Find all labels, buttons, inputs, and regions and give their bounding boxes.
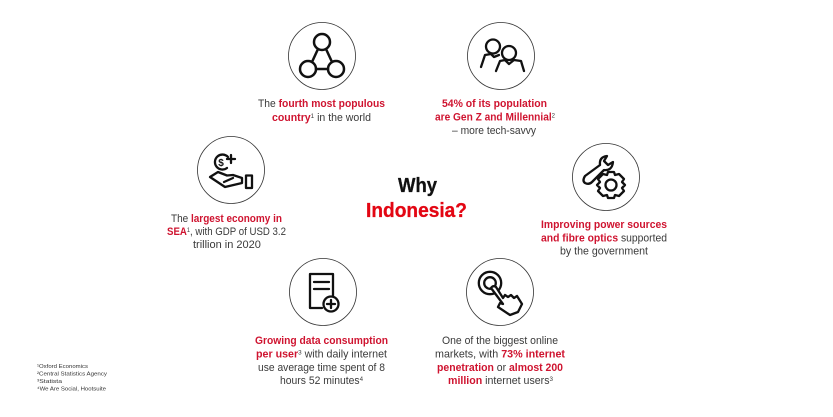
heading: Why Indonesia? <box>366 175 467 222</box>
text: largest economy: SEA <box>167 226 187 238</box>
text: data consumption: hours 52 minutes <box>280 375 364 387</box>
text: young population: 2 <box>552 112 555 120</box>
footnotes: ⁴We Are Social, Hootsuite <box>37 386 106 392</box>
text: data consumption: 4 <box>360 376 363 383</box>
icon: connected circles <box>288 22 356 90</box>
panel: young population <box>435 22 555 137</box>
text: data consumption: use average time spent of 8 <box>258 362 385 374</box>
text: online markets: 3 <box>550 376 553 383</box>
heading: Why Indonesia?: Why <box>398 175 438 197</box>
panel: largest economy <box>167 136 286 251</box>
text: largest economy: , with GDP of USD 3.2 <box>190 226 286 238</box>
text: largest economy: trillion in 2020 <box>193 239 261 251</box>
text: online markets: million internet users <box>448 375 552 387</box>
panel: populous country <box>258 22 385 124</box>
panel: data consumption <box>255 258 388 387</box>
text: data consumption: 3 <box>298 350 302 356</box>
text: data consumption: with daily internet <box>302 348 387 360</box>
text: populous country <box>258 98 385 124</box>
footnotes: ²Central Statistics Agency <box>37 372 107 378</box>
text: populous country: country <box>272 112 312 124</box>
text: online markets <box>435 335 565 387</box>
text: young population: – more tech-savvy <box>452 125 536 137</box>
text: online markets: One of the biggest online <box>442 335 558 347</box>
heading: Why Indonesia?: Indonesia? <box>366 200 467 222</box>
icon: two people <box>468 22 534 90</box>
icon: hand clicking <box>466 258 534 326</box>
footnotes: ¹Oxford Economics <box>37 364 88 370</box>
text: power and fibre: by the government <box>560 246 648 258</box>
text: populous country: The fourth most populous <box>258 98 385 110</box>
text: largest economy: The largest economy in <box>171 213 282 225</box>
text: data consumption: per user <box>256 348 299 360</box>
panel: online markets <box>435 258 565 387</box>
text: populous country: in the world <box>314 112 371 124</box>
text: data consumption <box>255 335 388 387</box>
footnotes <box>37 364 107 392</box>
text: online markets: penetration or almost 200 <box>437 362 563 374</box>
icon: hand with coin: $ <box>218 158 224 169</box>
text: largest economy: 1 <box>187 227 190 234</box>
text: young population: are Gen Z and Millennial <box>435 112 552 124</box>
panel: power and fibre <box>541 144 667 258</box>
text: data consumption: Growing data consumption <box>255 335 388 347</box>
text: power and fibre: Improving power sources <box>541 219 667 231</box>
text: power and fibre <box>541 219 667 258</box>
text: power and fibre: and fibre optics supported <box>541 232 667 244</box>
text: populous country: 1 <box>311 113 315 120</box>
icon: wrench and gear <box>572 144 640 210</box>
text: young population: 54% of its population <box>442 98 547 110</box>
text: online markets: markets, with 73% internet <box>435 348 565 360</box>
text: largest economy <box>167 213 286 251</box>
icon: document with plus <box>290 258 356 326</box>
text: young population <box>435 98 555 137</box>
footnotes: ³Statista <box>37 379 63 385</box>
